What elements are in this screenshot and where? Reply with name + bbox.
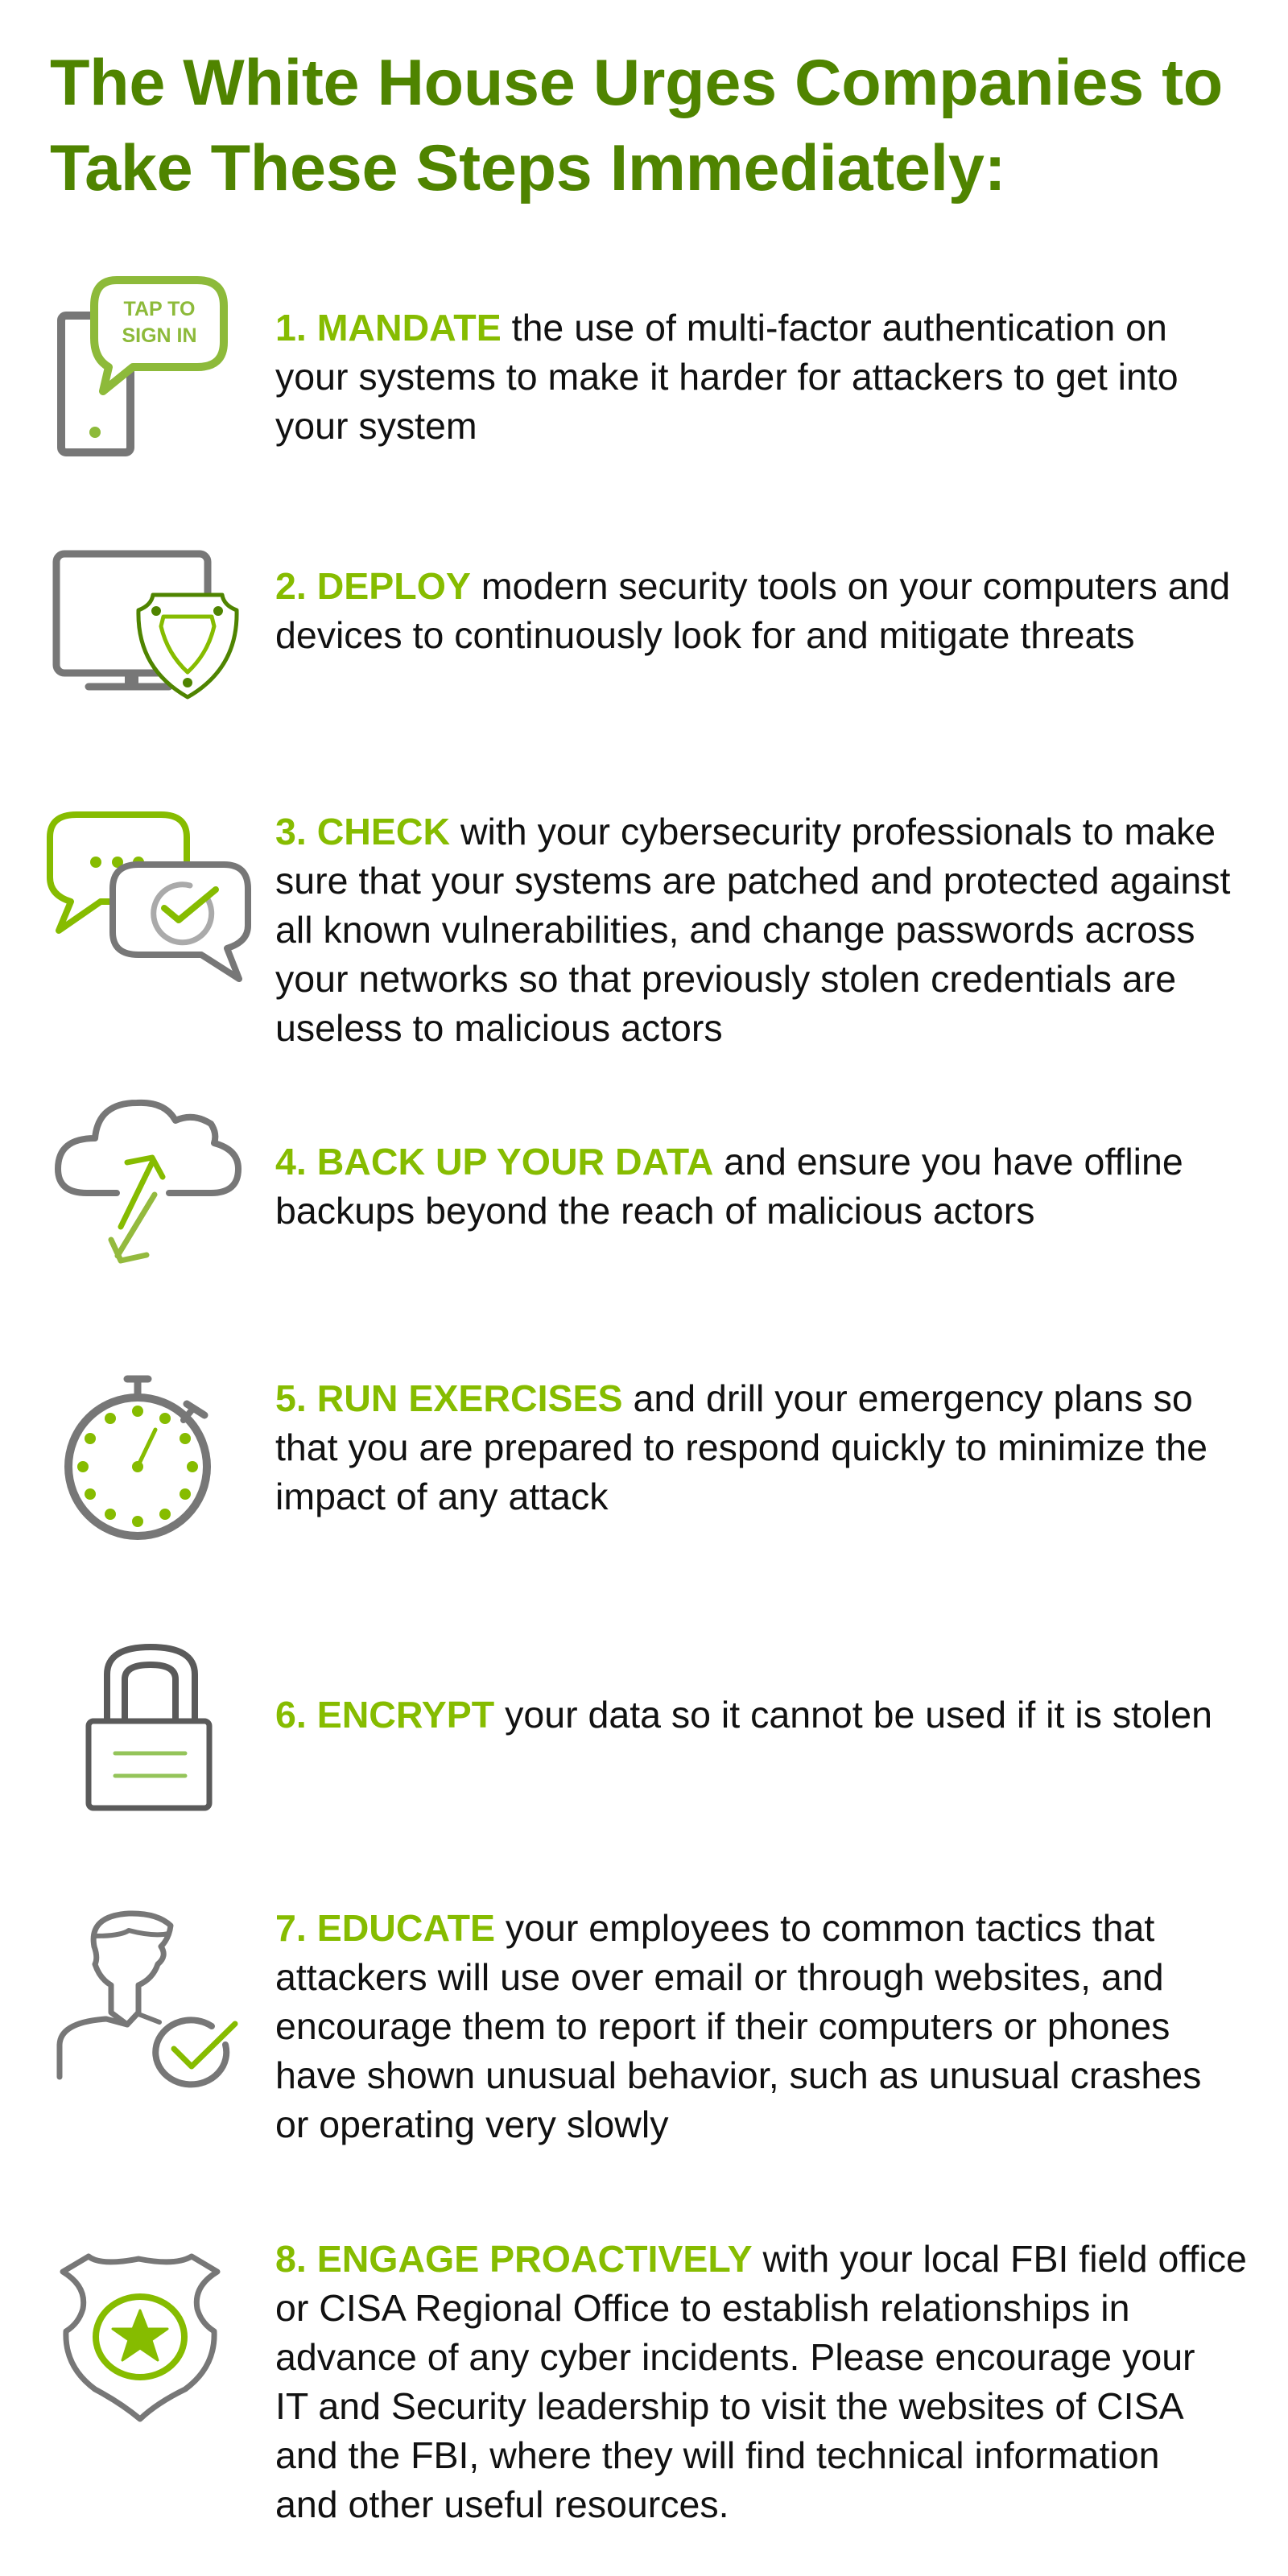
- step 7 text: have shown unusual behavior, such as unusual crashes: [275, 2054, 1201, 2096]
- icon: stopwatch: [68, 1379, 207, 1536]
- step 8 text: 8. ENGAGE PROACTIVELY with your local FBI field office: [275, 2238, 1247, 2280]
- step 2 text: [275, 565, 1230, 656]
- step 5 text: impact of any attack: [275, 1476, 609, 1517]
- step 1 text: [275, 307, 1179, 447]
- step 7 text: attackers will use over email or through websites, and: [275, 1956, 1164, 1998]
- step 1 text: your systems to make it harder for attackers to get into: [275, 356, 1179, 398]
- step 5 text: 5. RUN EXERCISES and drill your emergency plans so: [275, 1377, 1193, 1419]
- step 8 text: [275, 2238, 1247, 2525]
- title: Take These Steps Immediately:: [50, 132, 1005, 204]
- icon: person with check: [60, 1913, 235, 2084]
- step 4 text: backups beyond the reach of malicious actors: [275, 1190, 1034, 1232]
- step 2 text: devices to continuously look for and mitigate threats: [275, 614, 1135, 656]
- step 3 text: useless to malicious actors: [275, 1007, 723, 1049]
- step 3 text: your networks so that previously stolen credentials are: [275, 958, 1176, 1000]
- step 4 text: [275, 1141, 1183, 1232]
- icon: cloud with sync arrows: [58, 1103, 238, 1261]
- step 8 text: or CISA Regional Office to establish relationships in: [275, 2287, 1129, 2329]
- step 7 text: encourage them to report if their computers or phones: [275, 2005, 1170, 2047]
- title: [50, 47, 1223, 204]
- icon: phone with tap to sign in bubble: [61, 280, 224, 452]
- step 7 text: [275, 1907, 1201, 2145]
- step 5 text: [275, 1377, 1208, 1517]
- step 5 text: that you are prepared to respond quickly to minimize the: [275, 1426, 1208, 1468]
- step 3 text: 3. CHECK with your cybersecurity professionals to make: [275, 811, 1216, 852]
- step 7 text: 7. EDUCATE your employees to common tactics that: [275, 1907, 1154, 1949]
- step 8 text: IT and Security leadership to visit the websites of CISA: [275, 2385, 1184, 2427]
- title: The White House Urges Companies to: [50, 47, 1223, 119]
- step 4 text: 4. BACK UP YOUR DATA and ensure you have offline: [275, 1141, 1183, 1183]
- step 3 text: all known vulnerabilities, and change passwords across: [275, 909, 1195, 951]
- step 8 text: advance of any cyber incidents. Please encourage your: [275, 2336, 1195, 2378]
- icon: phone with tap to sign in bubble: SIGN IN: [122, 324, 197, 347]
- step 1 text: your system: [275, 405, 477, 447]
- step 8 text: and the FBI, where they will find technical information: [275, 2434, 1159, 2476]
- icon: monitor with shield: [56, 554, 237, 697]
- step 3 text: [275, 811, 1230, 1049]
- step 7 text: or operating very slowly: [275, 2103, 668, 2145]
- icon: chat bubbles with check: [50, 815, 248, 979]
- step 8 text: and other useful resources.: [275, 2483, 729, 2525]
- step 1 text: 1. MANDATE the use of multi-factor authentication on: [275, 307, 1167, 349]
- step 3 text: sure that your systems are patched and protected against: [275, 860, 1230, 902]
- step 2 text: 2. DEPLOY modern security tools on your computers and: [275, 565, 1230, 607]
- step 6 text: 6. ENCRYPT your data so it cannot be used if it is stolen: [275, 1694, 1212, 1736]
- icon: police badge with star: [63, 2256, 217, 2419]
- icon: phone with tap to sign in bubble: TAP TO: [124, 298, 195, 320]
- icon: padlock: [89, 1647, 209, 1808]
